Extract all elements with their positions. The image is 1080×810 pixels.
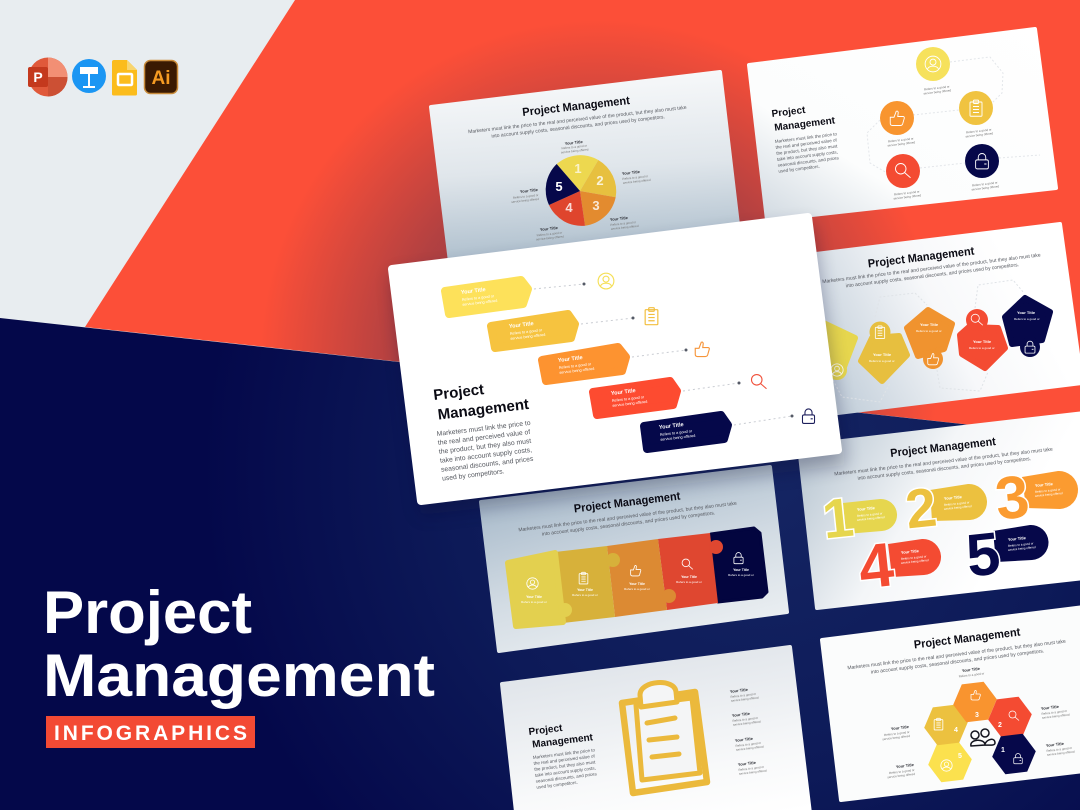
segment 2 bbox=[555, 546, 620, 623]
description: seasonal discounts, and prices bbox=[777, 155, 840, 168]
pill 5: service being offered bbox=[1008, 545, 1036, 552]
segment captions: Refers to a good or bbox=[624, 587, 650, 591]
segment captions: Your Title bbox=[526, 595, 542, 599]
label: infographics bbox=[46, 716, 255, 748]
hexagon 2: 2 bbox=[998, 722, 1002, 729]
hexagon 1: 1 bbox=[1001, 747, 1005, 754]
heading: Project Management bbox=[573, 490, 681, 515]
pill 4: Refers to a good or bbox=[901, 554, 927, 561]
hexagon captions bbox=[881, 665, 1075, 779]
pill 3: service being offered bbox=[1035, 491, 1063, 498]
heading: Project bbox=[432, 381, 485, 404]
description: take into account supply costs, bbox=[535, 765, 596, 778]
node captions: service being offered bbox=[923, 88, 952, 96]
pie labels: service being offered bbox=[611, 224, 639, 231]
description bbox=[533, 747, 599, 790]
heading: Project Management bbox=[522, 95, 631, 119]
shape: step 5: Refers to a good or bbox=[1014, 317, 1040, 321]
pie labels bbox=[510, 138, 651, 241]
shape: step 1 bbox=[815, 319, 855, 380]
description: the real and perceived value of bbox=[437, 429, 531, 447]
heading: Project Management bbox=[890, 436, 997, 460]
icon: Google Slides bbox=[112, 60, 137, 96]
pie labels: Refers to a good or bbox=[536, 231, 562, 237]
arrow: step 5: Refers to a good or bbox=[660, 429, 693, 437]
segment 5 bbox=[711, 528, 767, 602]
segment captions bbox=[521, 568, 754, 604]
node: search bbox=[886, 154, 920, 188]
pie chart: 1 bbox=[574, 161, 582, 176]
list captions: service being offered bbox=[736, 745, 764, 752]
shape: step 2: Refers to a good or bbox=[869, 359, 895, 363]
icon: PowerPoint: P bbox=[33, 69, 43, 85]
pill 1 bbox=[819, 486, 897, 550]
description: into account supply costs, seasonal discounts, and prices used by competitors. bbox=[870, 648, 1044, 676]
node: profile bbox=[916, 47, 950, 81]
heading: Management bbox=[774, 115, 836, 134]
segment captions: Refers to a good or bbox=[572, 593, 598, 597]
arrow: step 3: service being offered bbox=[559, 367, 595, 375]
hexagon 2 bbox=[988, 697, 1032, 737]
description: into account supply costs, seasonal discounts, and prices used by competitors. bbox=[857, 456, 1031, 482]
description: Marketers must link the price to the real and perceived value of the product, but they also must take bbox=[518, 501, 737, 533]
pie labels: Your Title bbox=[540, 225, 559, 232]
description: Marketers must link the price to the real and perceived value of the product, but they also must take bbox=[468, 105, 687, 135]
hexagon captions: service being offered bbox=[1042, 713, 1070, 720]
pill 2: Refers to a good or bbox=[944, 500, 970, 507]
list captions: Refers to a good or bbox=[738, 765, 764, 772]
hexagon captions: Your Title bbox=[1041, 704, 1060, 711]
description: used by competitors. bbox=[442, 468, 505, 483]
description bbox=[436, 420, 537, 483]
pie labels: service being offered bbox=[623, 178, 651, 185]
list captions: service being offered bbox=[733, 720, 761, 727]
background: orange diagonal block bbox=[85, 0, 1080, 437]
description bbox=[775, 131, 841, 174]
icon: Adobe Illustrator bbox=[144, 60, 178, 94]
pill 5: 5 bbox=[963, 519, 1003, 590]
arrow: step 5 bbox=[644, 415, 728, 449]
heading: Management bbox=[532, 732, 594, 751]
list captions: Refers to a good or bbox=[732, 716, 758, 723]
description: the real and perceived value of bbox=[533, 753, 596, 766]
segment icons bbox=[527, 553, 743, 589]
segment captions: Your Title bbox=[733, 568, 749, 572]
description: Marketers must link the price to bbox=[436, 420, 531, 438]
list captions: Your Title bbox=[730, 687, 749, 694]
background: orange shading behind slides bbox=[85, 0, 1080, 437]
pill 2: service being offered bbox=[944, 504, 972, 511]
description: the product, but they also must bbox=[534, 759, 596, 772]
heading: Project Management bbox=[867, 245, 975, 270]
dashed guides bbox=[867, 57, 1040, 173]
icon: Adobe Illustrator: Ai bbox=[152, 68, 170, 89]
list captions: Your Title bbox=[732, 711, 751, 718]
hexagon captions: Refers to a good or bbox=[1046, 746, 1072, 753]
hexagon 5: 5 bbox=[958, 753, 962, 760]
pie chart: 4 bbox=[565, 200, 573, 215]
list captions: Your Title bbox=[735, 736, 754, 743]
list captions bbox=[730, 686, 767, 776]
description: used by competitors. bbox=[778, 164, 820, 174]
arrow: step 3: Your Title bbox=[558, 355, 583, 364]
arrow: step 1: service being offered bbox=[462, 299, 498, 307]
shape: step 4 bbox=[960, 309, 1005, 368]
pill 4: service being offered bbox=[901, 558, 929, 565]
description: the product, but they also must bbox=[776, 143, 838, 156]
panel: puzzle slide bbox=[481, 467, 787, 651]
pie chart: 2 bbox=[596, 173, 604, 188]
description: Marketers must link the price to the real and perceived value of the product, but they also must take bbox=[822, 252, 1041, 285]
hexagon captions: Your Title bbox=[1046, 741, 1065, 748]
pill 1: Your Title bbox=[857, 505, 876, 512]
panel: pie chart slide bbox=[431, 72, 738, 262]
panel: honeycomb pentagon slide bbox=[815, 224, 1080, 413]
pie labels: Refers to a good or bbox=[561, 144, 587, 150]
icon row: software logos bbox=[28, 58, 178, 96]
heading bbox=[528, 719, 594, 751]
segment captions: Your Title bbox=[577, 588, 593, 592]
pie labels: Refers to a good or bbox=[622, 174, 648, 181]
icon: large clipboard bbox=[622, 683, 707, 793]
pie labels: Refers to a good or bbox=[610, 220, 636, 227]
pill 5: Your Title bbox=[1008, 535, 1027, 542]
description: used by competitors. bbox=[536, 780, 578, 790]
node captions: Refers to a good or bbox=[972, 180, 998, 188]
arrow: step 4 bbox=[593, 381, 677, 415]
pie labels: service being offered bbox=[561, 147, 589, 154]
dotted connectors bbox=[534, 284, 792, 425]
arrow: step 1 bbox=[445, 280, 528, 314]
icon: lock bbox=[802, 409, 815, 423]
icon: magnifier bbox=[752, 374, 766, 389]
arrow: step 5: Your Title bbox=[659, 422, 684, 431]
pie labels: Your Title bbox=[610, 215, 629, 222]
pill 3: 3 bbox=[992, 462, 1032, 533]
arrow: step 2 bbox=[491, 314, 575, 348]
arrow: step 5: service being offered bbox=[660, 434, 696, 442]
panel: main arrow slide bbox=[392, 217, 838, 501]
pill 5 bbox=[963, 519, 1049, 590]
label: infographics: INFOGRAPHICS bbox=[54, 722, 247, 745]
arrow: step 1: Your Title bbox=[461, 287, 486, 296]
pie chart: 3 bbox=[592, 198, 600, 213]
node: lock bbox=[965, 144, 999, 178]
description: seasonal discounts, and prices bbox=[535, 771, 598, 784]
hexagon captions: Refers to a good or bbox=[889, 768, 915, 775]
node captions: Refers to a good or bbox=[966, 127, 992, 135]
pill 1: service being offered bbox=[857, 515, 885, 522]
node captions: service being offered bbox=[965, 131, 994, 139]
pill 3 bbox=[992, 462, 1078, 533]
hexagon captions: Refers to a good or bbox=[958, 671, 984, 679]
pill 2: Your Title bbox=[944, 494, 963, 501]
description: seasonal discounts, and prices bbox=[441, 456, 534, 474]
hexagon captions: Your Title bbox=[891, 724, 910, 731]
pie labels: Your Title bbox=[520, 187, 539, 194]
node: thumb bbox=[880, 101, 914, 135]
shape: step 4: Refers to a good or bbox=[969, 346, 995, 350]
description: Marketers must link the price to bbox=[533, 747, 596, 760]
node captions: Refers to a good or bbox=[924, 84, 950, 92]
pie chart: 5 bbox=[555, 179, 563, 194]
shape: step 2 bbox=[861, 322, 907, 381]
description: take into account supply costs, bbox=[440, 447, 532, 465]
segment captions: Refers to a good or bbox=[676, 580, 702, 584]
heading bbox=[771, 101, 836, 134]
segment captions: Refers to a good or bbox=[521, 600, 547, 604]
node captions bbox=[887, 84, 1000, 201]
arrow: step 3: Refers to a good or bbox=[559, 362, 592, 370]
description: the real and perceived value of bbox=[775, 137, 838, 150]
hexagon 1 bbox=[992, 734, 1036, 774]
arrow: step 3 bbox=[542, 347, 626, 381]
pie labels: service being offered bbox=[511, 197, 539, 204]
description: into account supply costs, seasonal discounts, and prices used by competitors. bbox=[541, 510, 715, 538]
list captions: Refers to a good or bbox=[730, 692, 756, 699]
pill 3: Refers to a good or bbox=[1035, 487, 1061, 494]
pill 2 bbox=[903, 476, 987, 540]
hexagon captions: service being offered bbox=[887, 772, 916, 779]
arrow: step 2: service being offered bbox=[510, 333, 546, 341]
heading: Project Management bbox=[913, 626, 1021, 651]
shape: step 5 bbox=[1005, 298, 1050, 357]
arrow: step 2: Refers to a good or bbox=[510, 328, 543, 336]
icon: thumb bbox=[695, 342, 709, 356]
pill 1: 1 bbox=[819, 486, 856, 550]
icon: clipboard bbox=[645, 308, 658, 325]
icon: people bbox=[971, 729, 995, 746]
hexagon captions: service being offered bbox=[1047, 750, 1075, 757]
shape: step 3: Your Title bbox=[920, 322, 939, 327]
hexagon 3 bbox=[953, 682, 997, 722]
hexagon captions: Your Title bbox=[962, 666, 981, 673]
node captions: Refers to a good or bbox=[888, 136, 914, 144]
pie labels: Your Title bbox=[564, 139, 584, 146]
shadow under main slide bbox=[392, 223, 846, 515]
pill 4 bbox=[856, 530, 941, 603]
main title: Project bbox=[43, 579, 252, 646]
list captions: service being offered bbox=[731, 696, 759, 703]
panel: circles network slide bbox=[749, 29, 1056, 220]
shape: step 5: Your Title bbox=[1017, 310, 1036, 315]
shape: step 3: Refers to a good or bbox=[916, 329, 942, 333]
shape: step 3 bbox=[907, 310, 952, 369]
main title line 2: Management bbox=[43, 642, 435, 709]
icon: PowerPoint bbox=[28, 58, 68, 96]
segment captions: Your Title bbox=[629, 582, 645, 586]
description: Marketers must link the price to the real and perceived value of the product, but they also must take bbox=[847, 639, 1066, 671]
connector dots bbox=[582, 282, 794, 418]
node captions: service being offered bbox=[887, 140, 916, 148]
list captions: Refers to a good or bbox=[735, 741, 761, 748]
heading: Management bbox=[437, 396, 530, 424]
pie chart bbox=[546, 155, 616, 226]
pie labels: Your Title bbox=[622, 169, 641, 176]
hexagon captions: service being offered bbox=[882, 734, 911, 741]
shape: step 4: Your Title bbox=[973, 339, 992, 344]
icon: person bbox=[598, 273, 614, 289]
arrow: step 4: Your Title bbox=[611, 388, 636, 397]
hexagon 4: 4 bbox=[954, 727, 958, 734]
panel: hexagon slide bbox=[822, 607, 1080, 800]
node captions: service being offered bbox=[971, 184, 1000, 192]
segment 4 bbox=[658, 533, 723, 610]
shape: step 2: Your Title bbox=[873, 352, 892, 357]
hexagon 4 bbox=[924, 705, 968, 745]
description: take into account supply costs, bbox=[777, 149, 838, 162]
description: the product, but they also must bbox=[439, 438, 532, 456]
arrow: step 4: Refers to a good or bbox=[612, 395, 645, 403]
hexagon captions: Refers to a good or bbox=[884, 730, 910, 737]
heading: Project bbox=[771, 105, 807, 120]
segment 3 bbox=[607, 539, 676, 617]
panel: numbered pills slide bbox=[799, 413, 1080, 608]
heading: Project bbox=[528, 723, 564, 738]
description: Marketers must link the price to bbox=[775, 131, 838, 144]
pill 4: 4 bbox=[856, 530, 898, 603]
list captions: service being offered bbox=[739, 769, 767, 776]
pie labels: service being offered bbox=[536, 234, 564, 241]
icon: Keynote bbox=[72, 59, 106, 93]
heading bbox=[432, 376, 530, 424]
description: Marketers must link the price to the real and perceived value of the product, but they also must take bbox=[834, 447, 1053, 477]
panel: clipboard slide bbox=[502, 647, 812, 810]
pill 5: Refers to a good or bbox=[1008, 541, 1034, 548]
description: into account supply costs, seasonal discounts, and prices used by competitors. bbox=[491, 114, 665, 140]
segment 1 bbox=[508, 553, 572, 626]
arrow: step 2: Your Title bbox=[509, 321, 534, 330]
arrow: step 4: service being offered bbox=[612, 400, 648, 408]
pie labels: Refers to a good or bbox=[513, 193, 539, 200]
node: clipboard bbox=[959, 91, 993, 125]
hexagon 3: 3 bbox=[975, 712, 979, 719]
pill 4: Your Title bbox=[901, 548, 920, 555]
list captions: Your Title bbox=[738, 760, 757, 767]
pill 3: Your Title bbox=[1035, 481, 1054, 488]
node captions: service being offered bbox=[893, 193, 922, 201]
segment captions: Refers to a good or bbox=[728, 573, 754, 577]
segment captions: Your Title bbox=[681, 575, 697, 579]
description: into account supply costs, seasonal discounts, and prices used by competitors. bbox=[845, 262, 1019, 289]
hexagon 5 bbox=[928, 742, 972, 782]
pill 1: Refers to a good or bbox=[857, 511, 883, 518]
arrow: step 1: Refers to a good or bbox=[462, 294, 495, 302]
dashed guides bbox=[833, 280, 1024, 402]
hexagon captions: Your Title bbox=[896, 762, 915, 769]
hexagon captions: Refers to a good or bbox=[1041, 709, 1067, 716]
node captions: Refers to a good or bbox=[894, 189, 920, 197]
background: navy lower block bbox=[0, 318, 1080, 810]
pill 2: 2 bbox=[903, 476, 939, 540]
